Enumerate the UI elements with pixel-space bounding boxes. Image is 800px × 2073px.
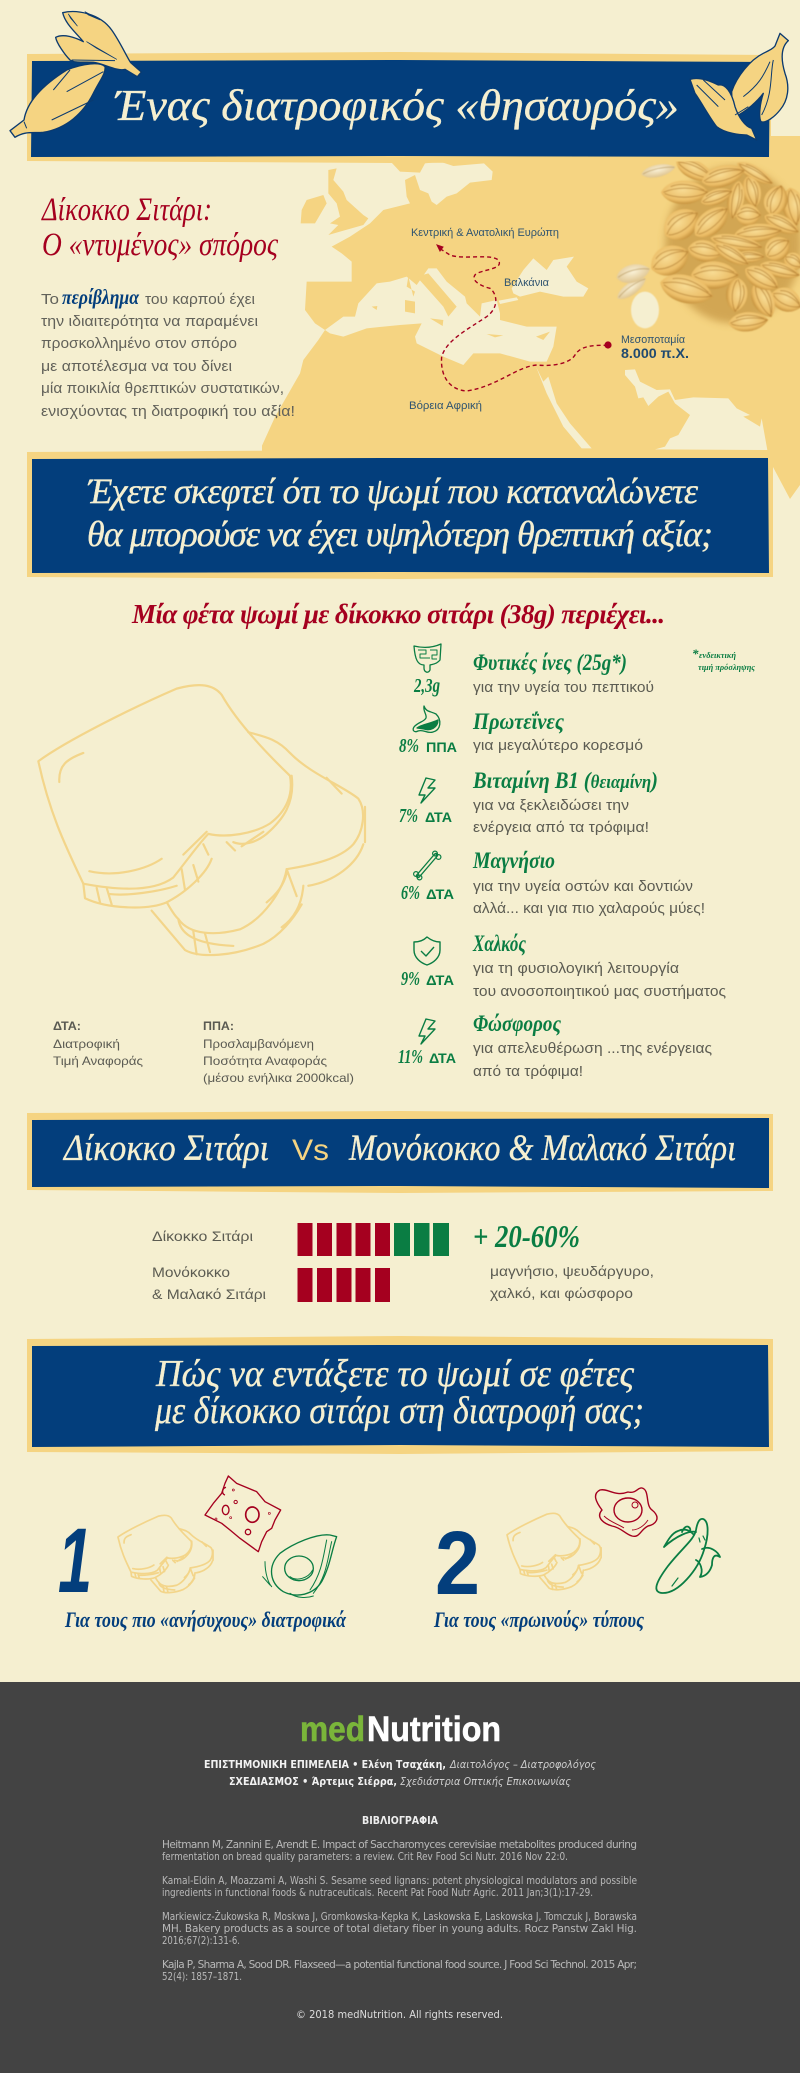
icon: stomach [413,706,440,732]
nutrient: vitamin B1: Βιταμίνη Β1 (θειαμίνη) [472,768,658,793]
icon: avocado [263,1535,337,1598]
nutrient: magnesium: για την υγεία οστών και δοντιών [473,878,693,895]
bibliography references: fermentation on bread quality parameters: a review. Crit Rev Food Sci Nutr. 2016 Nov 22:0. [162,1851,568,1863]
icon: left wheat grains [10,12,141,137]
nutrient: magnesium: Μαγνήσιο [472,848,555,873]
heading: emmer wheat, the dressed seed: Δίκοκκο Σιτάρι: [40,192,212,228]
route on map with labels: Βόρεια Αφρική [409,400,482,412]
nutrient: phosphorus: για απελευθέρωση ...της ενέργειας [473,1040,712,1057]
chart: nutrient comparison bars: + 20-60% [473,1218,580,1254]
bibliography references: MH. Bakery products as a source of total dietary fiber in young adults. Rocz Panstw Zakl Hig. [162,1923,637,1935]
chart: nutrient comparison bars: & Μαλακό Σιτάρι [152,1286,266,1302]
banner: comparison: Vs [292,1134,329,1167]
nutrient: fibre: για την υγεία του πεπτικού [473,679,654,696]
nutrient: protein: ΠΠΑ [426,739,457,755]
nutrient: copper: για τη φυσιολογική λειτουργία [473,960,679,977]
bibliography references: Heitmann M, Zannini E, Arendt E. Impact of Saccharomyces cerevisiae metabolites produced during [162,1839,637,1851]
banner: main title [27,52,771,163]
title text: Ένας διατροφικός «θησαυρός» [114,81,679,130]
legend: DTA and PPA: ΔΤΑ: [53,1019,81,1033]
credits [204,1758,596,1788]
suggestion 1: bread with cheese and avocado [58,1476,347,1632]
text block: husk description: προσκολλημένο στον σπόρο [41,335,237,352]
nutrient: copper: 9% [401,968,420,990]
nutrient: magnesium: αλλά... και για πιο χαλαρούς μύες! [473,900,705,917]
nutrient: copper [401,931,726,1000]
text block: husk description: ενισχύοντας τη διατροφική του αξία! [41,403,295,420]
nutrient: fibre [413,644,654,697]
icon: right wheat grains [690,33,788,140]
nutrient: vitamin B1: ΔΤΑ [425,809,452,825]
route on map with labels: Βαλκάνια [504,277,550,289]
logo: medNutrition: med [300,1710,365,1749]
note: indicative intake value: τιμή πρόσληψης [698,663,755,672]
bibliography references: 52(4): 1857–1871. [162,1971,242,1983]
nutrient: magnesium [401,848,705,917]
legend: DTA and PPA [53,1019,354,1085]
bibliography references: Markiewicz-Żukowska R, Moskwa J, Gromkowska-Kępka K, Laskowska E, Laskowska J, Tomczuk J, Borawska [162,1910,637,1923]
legend: DTA and PPA: Τιμή Αναφοράς [53,1054,143,1068]
caption: Για τους πιο «ανήσυχους» διατροφικά [64,1607,347,1632]
legend: DTA and PPA: Προσλαμβανόμενη [203,1037,314,1051]
chart: nutrient comparison bars: χαλκό, και φώσφορο [490,1285,633,1301]
text block: husk description [41,285,295,420]
route on map with labels: Κεντρική & Ανατολική Ευρώπη [411,227,559,239]
nutrient: magnesium: 6% [401,882,420,904]
bibliography references: 2016;67(2):131-6. [162,1935,240,1947]
text block: husk description: με αποτέλεσμα να του δίνει [41,358,232,375]
chart: nutrient comparison bars: Μονόκοκκο [152,1264,230,1280]
nutrient: copper: Χαλκός [472,931,527,956]
credits: Σχεδιάστρια Οπτικής Επικοινωνίας [400,1775,571,1788]
text block: husk description: Το [41,291,59,308]
credits: ΣΧΕΔΙΑΣΜΟΣ • Άρτεμις Σιέρρα, [229,1775,397,1788]
icon: bread [118,1515,213,1593]
banner: how to include bread: με δίκοκκο σιτάρι στη διατροφή σας; [154,1390,644,1432]
banner: comparison: Μονόκοκκο & Μαλακό Σιτάρι [348,1128,736,1169]
legend: DTA and PPA: (μέσου ενήλικα 2000kcal) [203,1071,354,1085]
banner: question about bread: θα μπορούσε να έχει υψηλότερη θρεπτική αξία; [87,514,713,554]
nutrient: magnesium: ΔΤΑ [426,886,454,902]
note: indicative intake value: * [692,646,699,661]
nutrient: protein: Πρωτεΐνες [472,709,565,734]
nutrient: phosphorus: από τα τρόφιμα! [473,1063,583,1080]
heading: emmer wheat, the dressed seed: Ο «ντυμένος» σπόρος [42,227,279,263]
text block: husk description: περίβλημα [62,285,139,309]
text block: husk description: την ιδιαιτερότητα να παραμένει [41,313,258,330]
heading: one slice contains: Μία φέτα ψωμί με δίκοκκο σιτάρι (38g) περιέχει... [131,599,665,629]
icon: cheese [205,1476,281,1552]
nutrient: vitamin B1: 7% [399,805,418,827]
icon: intestine [414,644,441,672]
text block: husk description: του καρπού έχει [145,291,255,308]
chart: nutrient comparison bars [152,1218,654,1302]
nutrient: protein: 8% [399,735,419,757]
bibliography heading: ΒΙΒΛΙΟΓΡΑΦΙΑ [362,1815,439,1827]
icon: shield with check [414,937,440,965]
icon: bone [414,851,441,880]
icon: banana [656,1519,720,1593]
icon: lightning bolt [419,1019,435,1044]
icon: lightning bolt [419,778,435,803]
route on map with labels [409,227,689,412]
icon: fried egg [596,1488,657,1536]
logo: medNutrition: Nutrition [367,1710,501,1749]
nutrient: vitamin B1: για να ξεκλειδώσει την [473,797,629,814]
credits: Διαιτολόγος – Διατροφολόγος [449,1758,596,1771]
logo: medNutrition [300,1710,501,1749]
legend: DTA and PPA: Διατροφική [53,1037,120,1051]
nutrient: fibre: Φυτικές ίνες (25g*) [473,650,627,675]
nutrient: copper: ΔΤΑ [426,972,454,988]
bibliography references: ingredients in functional foods & nutraceuticals. Recent Pat Food Nutr Agric. 2011 Jan;3(1):17-29. [162,1887,593,1899]
note: indicative intake value: ενδεικτική [699,651,737,660]
nutrient: vitamin B1 [399,768,658,836]
icon: bread [507,1513,601,1590]
number 2: 2 [435,1514,480,1614]
banner: how to include bread [27,1336,773,1454]
number 1: 1 [58,1510,92,1612]
banner: question about bread [27,450,773,579]
nutrient: phosphorus: 11% [398,1046,423,1068]
map of Europe, North Africa and the Middle East [193,136,800,499]
bibliography references: Kamal-Eldin A, Moazzami A, Washi S. Sesame seed lignans: potent physiological modulators and possible [162,1875,637,1887]
chart: nutrient comparison bars: Δίκοκκο Σιτάρι [152,1228,253,1244]
banner: comparison: Δίκοκκο Σιτάρι [62,1128,269,1169]
photo: husked wheat grains [614,153,800,333]
legend: DTA and PPA: Ποσότητα Αναφοράς [203,1054,327,1068]
illustration: large bread slices [38,685,365,955]
suggestion 2: bread with egg and banana [433,1488,720,1632]
nutrient: phosphorus: Φώσφορος [473,1011,562,1036]
caption: Για τους «πρωινούς» τύπους [433,1607,644,1632]
footer panel [0,1682,800,2073]
note: indicative intake value [692,646,755,672]
nutrient: vitamin B1: ενέργεια από τα τρόφιμα! [473,819,649,836]
nutrient: protein: για μεγαλύτερο κορεσμό [473,737,643,754]
credits: ΕΠΙΣΤΗΜΟΝΙΚΗ ΕΠΙΜΕΛΕΙΑ • Ελένη Τσαχάκη, [204,1758,446,1771]
banner: question about bread: Έχετε σκεφτεί ότι το ψωμί που καταναλώνετε [87,471,699,511]
heading: emmer wheat, the dressed seed [40,192,279,263]
text block: husk description: μία ποικιλία θρεπτικών συστατικών, [41,380,284,397]
nutrient: protein [399,706,643,757]
banner: how to include bread: Πώς να εντάξετε το ψωμί σε φέτες [155,1353,635,1395]
nutrient: phosphorus: ΔΤΑ [429,1050,456,1066]
route on map with labels: 8.000 π.Χ. [621,345,689,361]
nutrient: copper: του ανοσοποιητικού μας συστήματος [473,983,726,1000]
chart: nutrient comparison bars: μαγνήσιο, ψευδάργυρο, [490,1263,654,1279]
route on map with labels: Μεσοποταμία [621,334,686,346]
banner: comparison [27,1111,773,1193]
bibliography references: Kajla P, Sharma A, Sood DR. Flaxseed—a potential functional food source. J Food Sci Technol. 2015 Apr; [162,1959,637,1971]
bibliography references [162,1839,637,1983]
legend: DTA and PPA: ΠΠΑ: [203,1019,234,1033]
nutrient: phosphorus [398,1011,712,1080]
nutrient: fibre: 2,3g [413,675,440,697]
copyright: © 2018 medNutrition. All rights reserved. [296,2008,503,2021]
